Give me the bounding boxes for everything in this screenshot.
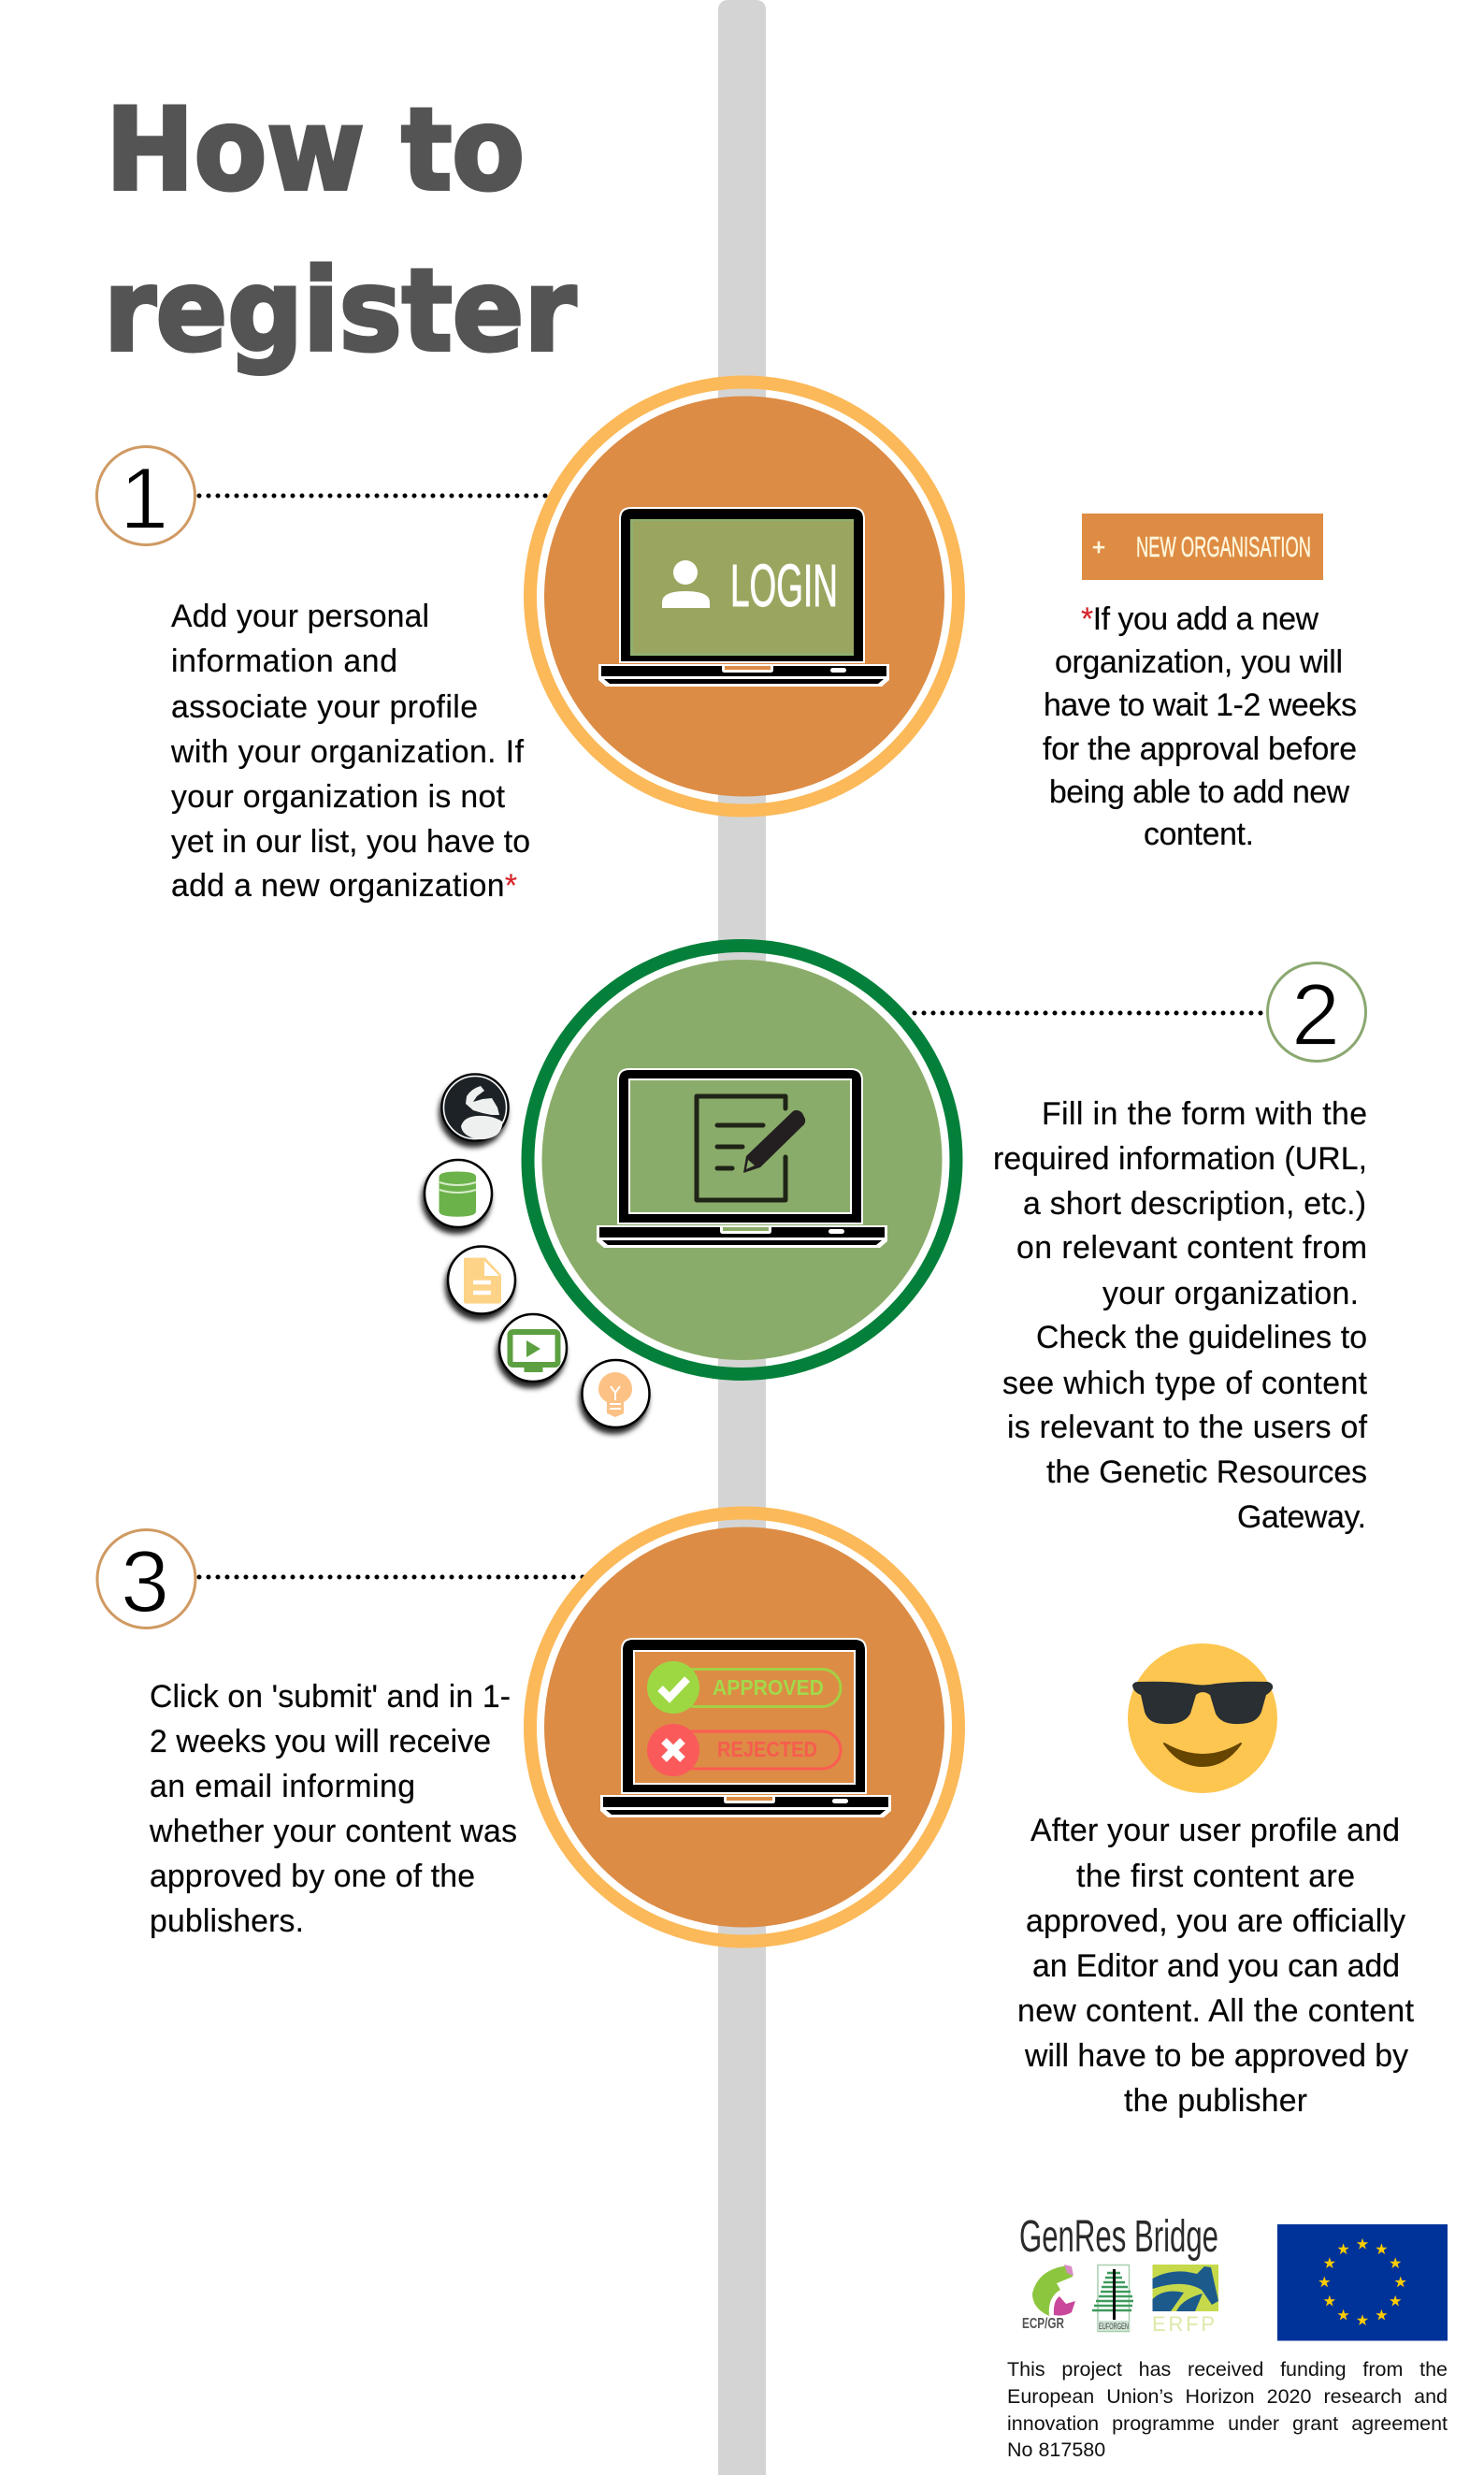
icon: video <box>499 1314 567 1382</box>
icon: laptop login <box>598 508 889 687</box>
step 1 circle with login laptop <box>530 382 958 810</box>
funding statement <box>1007 2358 1448 2461</box>
closing note: new content. All the content <box>1017 1993 1415 2029</box>
step 3 number badge <box>97 1530 195 1630</box>
closing note: After your user profile and <box>1030 1813 1400 1848</box>
note about new organization: being able to add new <box>1049 774 1350 810</box>
icon: laptop approved or rejected <box>600 1639 891 1817</box>
step 2 description: required information (URL, <box>993 1141 1367 1177</box>
funding statement: European Union’s Horizon 2020 research and <box>1007 2385 1448 2408</box>
step 3 description: an email informing <box>150 1769 415 1804</box>
step 2 description: Check the guidelines to <box>1036 1320 1367 1355</box>
new organisation button: NEW ORGANISATION <box>1136 531 1311 563</box>
note about new organization: organization, you will <box>1055 644 1343 680</box>
icon: document <box>448 1246 515 1313</box>
new organisation button <box>1082 514 1323 580</box>
step 3 number badge: 3 <box>121 1532 169 1630</box>
step 1 number badge: 1 <box>120 449 168 547</box>
step 2 description: on relevant content from <box>1016 1230 1367 1266</box>
GenRes Bridge logo: GenRes Bridge <box>1019 2212 1218 2262</box>
icon: database <box>425 1160 492 1227</box>
closing note <box>1017 1813 1415 2119</box>
step 2 description: Fill in the form with the <box>1042 1096 1367 1132</box>
closing note: approved, you are officially <box>1026 1903 1405 1939</box>
step 1 description: associate your profile <box>171 689 478 725</box>
step 1 description: Add your personal <box>171 599 429 634</box>
step 1 description: your organization is not <box>171 779 506 815</box>
closing note: will have to be approved by <box>1024 2038 1408 2074</box>
note about new organization: have to wait 1-2 weeks <box>1044 688 1357 723</box>
title <box>104 84 576 377</box>
step 3 description <box>149 1679 517 1939</box>
step 3 description: Click on 'submit' and in 1- <box>150 1679 511 1715</box>
ERFP logo <box>1152 2265 1218 2336</box>
closing note: the first content are <box>1076 1859 1355 1894</box>
step 2 number badge <box>1268 963 1365 1064</box>
funding statement: This project has received funding from the <box>1007 2358 1448 2381</box>
funding statement: innovation programme under grant agreement <box>1007 2412 1448 2435</box>
step 2 description: see which type of content <box>1002 1366 1368 1401</box>
timeline bar <box>718 0 766 2475</box>
note about new organization: for the approval before <box>1043 731 1357 767</box>
ERFP logo: ERFP <box>1152 2312 1218 2336</box>
icon: laptop with form <box>597 1069 887 1248</box>
note about new organization: *If you add a new <box>1081 601 1319 637</box>
step 2 number badge: 2 <box>1291 965 1340 1064</box>
icon: laptop login: LOGIN <box>730 552 838 619</box>
step 1 description: information and <box>171 644 397 679</box>
new organisation button: + <box>1092 535 1105 560</box>
step 2 description: a short description, etc.) <box>1023 1186 1366 1222</box>
step 2 description: your organization. <box>1102 1276 1359 1311</box>
step 2 description: the Genetic Resources <box>1046 1455 1367 1490</box>
title: How to <box>106 84 525 216</box>
step 2 description: Gateway. <box>1237 1499 1366 1535</box>
title: register <box>104 245 576 377</box>
step 2 dotted connector <box>915 1010 1264 1016</box>
EU flag <box>1277 2224 1448 2340</box>
icon: laptop approved or rejected: APPROVED <box>713 1675 824 1700</box>
step 1 number badge <box>97 447 195 547</box>
EUFORGEN logo: EUFORGEN <box>1099 2322 1129 2331</box>
step 3 description: publishers. <box>150 1903 304 1939</box>
icon: sunglasses emoji <box>1128 1643 1277 1793</box>
step 1 description: with your organization. If <box>170 734 525 770</box>
step 3 description: 2 weeks you will receive <box>150 1724 491 1759</box>
ECPGR logo <box>1022 2265 1075 2332</box>
note about new organization: content. <box>1144 817 1254 852</box>
step 3 circle with approval laptop <box>530 1513 958 1942</box>
step 1 description: add a new organization* <box>171 868 517 904</box>
step 2 description <box>993 1096 1368 1535</box>
step 2 description: is relevant to the users of <box>1007 1410 1368 1445</box>
closing note: the publisher <box>1124 2083 1307 2119</box>
EUFORGEN logo <box>1092 2265 1133 2331</box>
step 3 dotted connector <box>199 1575 589 1579</box>
step 1 description <box>170 599 530 904</box>
step 1 description: yet in our list, you have to <box>171 824 530 860</box>
ECPGR logo: ECP/GR <box>1022 2316 1064 2332</box>
closing note: an Editor and you can add <box>1032 1948 1400 1984</box>
step 3 description: whether your content was <box>149 1814 517 1849</box>
step 1 dotted connector <box>199 494 552 498</box>
icon: laptop approved or rejected: REJECTED <box>717 1737 817 1761</box>
icon: globe <box>441 1074 509 1141</box>
icon: light bulb <box>582 1360 649 1427</box>
note about new organization <box>1043 601 1357 852</box>
step 2 circle with form laptop <box>527 946 956 1374</box>
step 3 description: approved by one of the <box>150 1859 475 1894</box>
funding statement: No 817580 <box>1007 2439 1105 2461</box>
